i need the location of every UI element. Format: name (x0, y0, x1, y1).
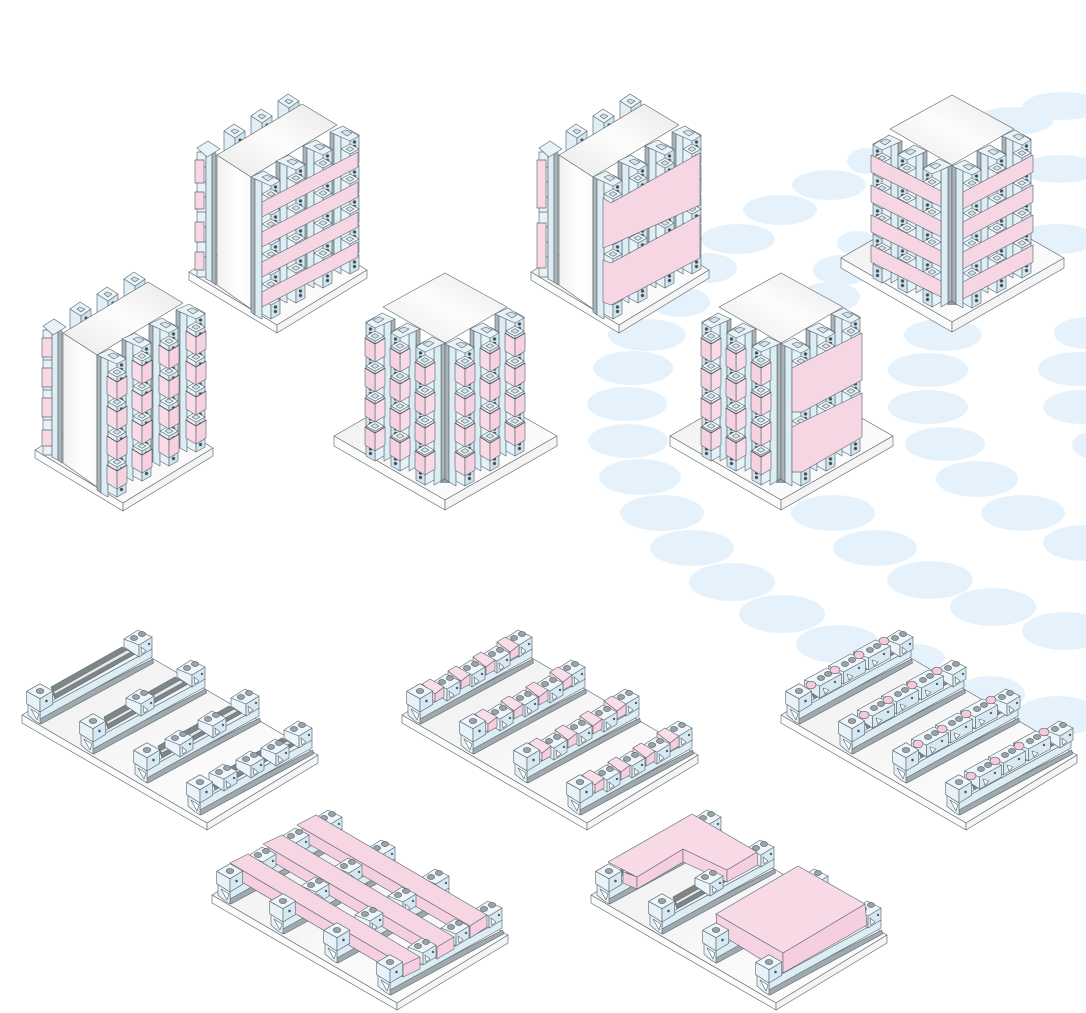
rail panel 2: pink blocks between carriages (402, 630, 698, 830)
corner blocks (596, 864, 782, 983)
right column group (781, 308, 860, 486)
right pink bars (963, 155, 1033, 299)
columns (873, 130, 1031, 308)
right column group (445, 308, 525, 486)
left-side pink panels (537, 160, 546, 268)
left pink bars (871, 155, 941, 297)
tower 3: symmetric columns with pink squares (334, 273, 557, 510)
pink U-shape block (608, 814, 758, 889)
rail bases (218, 827, 504, 995)
near corner blocks (217, 864, 403, 983)
rail with end carriage (27, 630, 154, 724)
left-side pink squares (42, 338, 52, 446)
tower 5: left pink squares and right large pink panels (670, 273, 893, 510)
pink squares on columns (107, 331, 206, 489)
near carriages (248, 847, 436, 965)
pink bar 3 (297, 815, 487, 938)
large pink panels (603, 153, 700, 305)
rail with two mid carriages (134, 689, 260, 783)
pink bar 1 (230, 854, 420, 977)
left column group (701, 313, 781, 485)
tower 6: symmetric rack with horizontal pink bars (841, 95, 1064, 332)
left-side pink squares (195, 160, 204, 270)
pink bar 2 (263, 835, 454, 959)
tower 4: rack with two large pink panels (531, 94, 709, 333)
middle carriage in front of U-shape (695, 869, 723, 896)
tower 2: columns with pink squares (35, 272, 213, 511)
middle carriages (281, 828, 469, 946)
rail panel 5: pink U-shape and pink box (591, 810, 887, 1010)
rail with one mid carriage (80, 660, 206, 754)
rail panel 3: pink discs on carriages (781, 630, 1077, 830)
horizontal pink bars (262, 152, 358, 307)
rail panel 4: three long pink bars across rails (212, 810, 508, 1010)
rails (597, 810, 882, 995)
rail with three mid carriages (187, 721, 314, 815)
left column group (365, 313, 445, 485)
rail panel 1: empty rails with carriages (22, 630, 318, 830)
large pink panels (792, 333, 862, 472)
background: pale blue ellipse pattern (587, 92, 1086, 736)
pink box (716, 866, 867, 973)
far carriages (314, 810, 502, 928)
tower 1: column rack with horizontal pink bars (189, 94, 367, 333)
